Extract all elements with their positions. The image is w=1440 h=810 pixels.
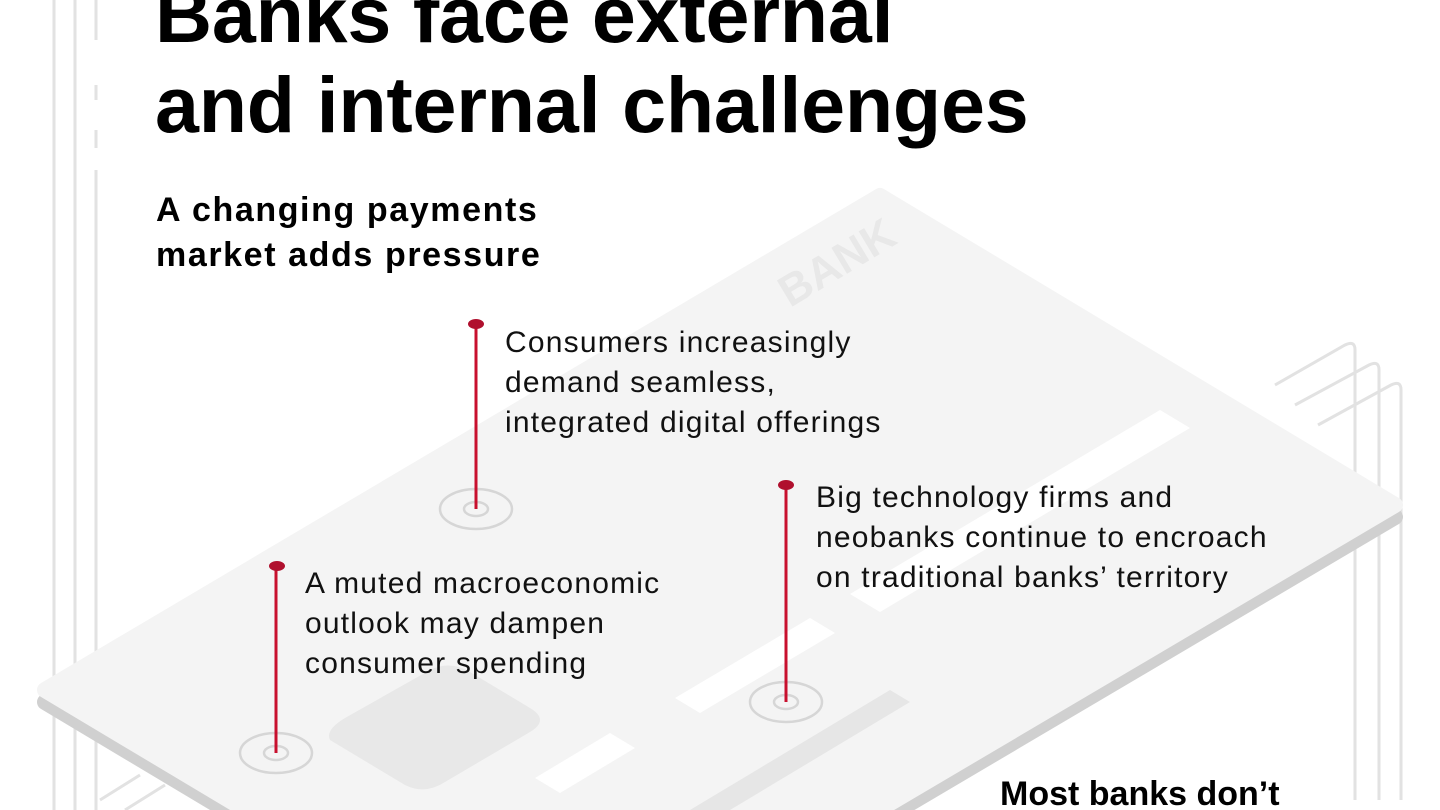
markers: [240, 489, 822, 773]
subtitle: A changing payments: [156, 191, 538, 229]
title: and internal challenges: [155, 60, 1028, 149]
subtitle: market adds pressure: [156, 236, 541, 274]
callout: big tech: on traditional banks’ territory: [816, 561, 1229, 594]
card: [45, 196, 1395, 810]
callout: big tech: Big technology firms and: [816, 481, 1173, 514]
subtitle: [156, 191, 541, 274]
callout: macro: A muted macroeconomic: [305, 567, 660, 600]
callout: macro: consumer spending: [305, 647, 587, 680]
callout: macro: [305, 567, 660, 680]
callout: consumers: Consumers increasingly: [505, 326, 852, 359]
callout: macro: outlook may dampen: [305, 607, 605, 640]
callout: big tech: [816, 481, 1268, 594]
callout: consumers: integrated digital offerings: [505, 406, 882, 439]
title: [155, 0, 1028, 149]
card: BANK: [770, 209, 904, 317]
callout: consumers: [505, 326, 882, 439]
callout: big tech: neobanks continue to encroach: [816, 521, 1268, 554]
callout: consumers: demand seamless,: [505, 366, 776, 399]
